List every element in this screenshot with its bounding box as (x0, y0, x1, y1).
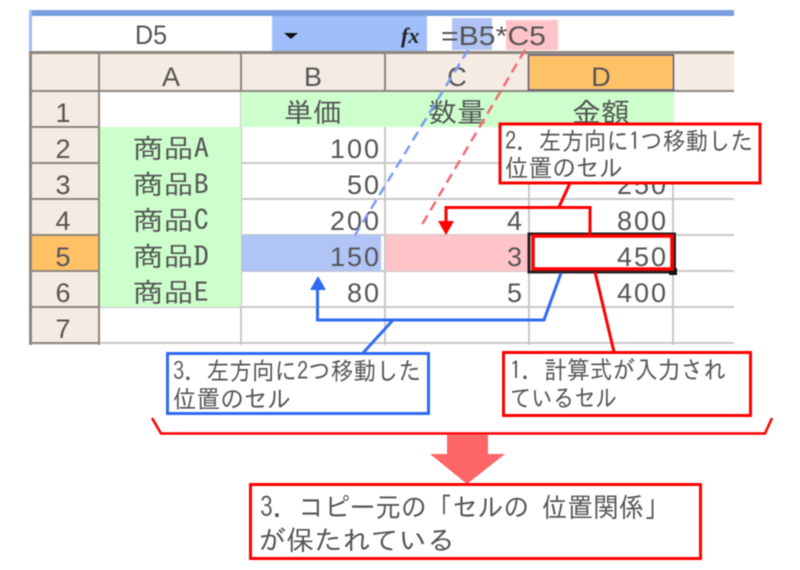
numeric values: 250 (617, 170, 666, 200)
formula: =B5*C5: =B5*C5 (441, 21, 546, 51)
row headers: 5 (55, 242, 71, 272)
callout 2: 2. 左方向に1つ移動した (505, 129, 753, 154)
selected cell D5 (529, 234, 677, 275)
selected cell D5: 450 (617, 242, 666, 272)
row headers: 7 (55, 314, 71, 344)
red dashed reference line (420, 50, 525, 228)
header labels: 単価 数量 金額: 金額 (572, 99, 630, 126)
callout 3 blue: 3. 左方向に2つ移動した (173, 359, 421, 384)
callout 2 (500, 124, 760, 183)
numeric values: 150 (330, 242, 379, 272)
header labels: 単価 数量 金額: 単価 (284, 99, 342, 126)
down arrow (430, 435, 505, 484)
column headers: A (162, 62, 180, 92)
bracket (152, 418, 772, 434)
row headers: 1 (55, 98, 71, 128)
numeric values: 50 (347, 170, 379, 200)
numeric values: 4 (507, 206, 522, 236)
product names: 商品D (133, 243, 209, 270)
callout 3 blue (168, 354, 428, 414)
header labels: 単価 数量 金額: 数量 (428, 99, 486, 126)
column headers: B (304, 62, 322, 92)
numeric values: 100 (330, 134, 379, 164)
row headers: 3 (55, 170, 71, 200)
product names: 商品A (133, 135, 209, 162)
numeric values: 5 (507, 278, 522, 308)
row headers: 6 (55, 278, 71, 308)
row headers: 4 (55, 206, 71, 236)
row headers (29, 54, 100, 345)
callout 1 (504, 352, 750, 416)
blue arrow to B5 (310, 273, 561, 353)
column headers: C (447, 62, 467, 92)
product names: 商品B (133, 171, 209, 198)
callout 1: ているセル (510, 386, 617, 411)
icon: dropdown triangle (284, 33, 298, 39)
callout 2: 位置のセル (505, 156, 623, 181)
row headers: 2 (55, 134, 71, 164)
icon: fx: fx (401, 23, 419, 48)
callout 1: 1. 計算式が入力され (510, 358, 726, 383)
numeric values: 400 (617, 278, 666, 308)
cell grid and fills (100, 92, 734, 345)
conclusion box: が保たれている (258, 527, 455, 554)
header labels: 単価 数量 金額 (284, 99, 630, 126)
numeric values: 3 (507, 242, 522, 272)
numeric values: 800 (617, 206, 666, 236)
conclusion box (250, 484, 700, 558)
numeric values: 200 (330, 206, 379, 236)
numeric values (330, 134, 666, 308)
conclusion box: 3. コピー元の「セルの 位置関係」 (260, 494, 670, 521)
product names (133, 135, 209, 306)
column headers (30, 54, 734, 92)
column headers: D (591, 62, 611, 92)
blue dashed reference line (355, 50, 468, 235)
red leader to callout 1 (595, 272, 614, 352)
red arrow to C5 (438, 183, 590, 235)
name box: D5: D5 (135, 20, 167, 50)
numeric values: 80 (347, 278, 379, 308)
product names: 商品E (133, 279, 209, 306)
product names: 商品C (133, 207, 209, 234)
callout 3 blue: 位置のセル (173, 387, 291, 412)
formula bar (29, 10, 734, 54)
